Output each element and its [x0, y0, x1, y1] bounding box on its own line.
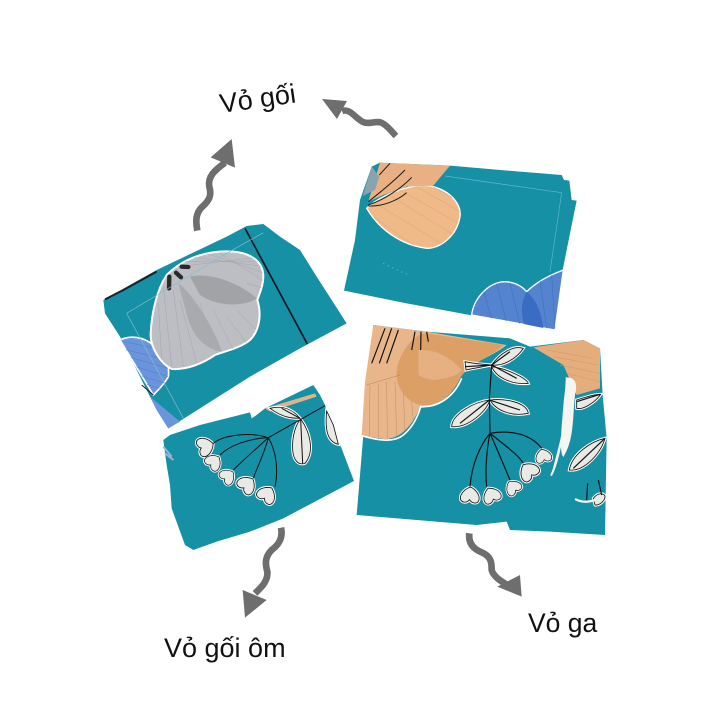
panel: bolster case [163, 385, 354, 550]
arrow: to Vỏ ga [469, 533, 522, 597]
leaves and heart flowers [452, 348, 605, 505]
panel: top-right pillowcase [344, 163, 577, 330]
panel: left pillowcase [103, 224, 347, 428]
stamen [169, 267, 188, 288]
label: Vỏ gối ôm: Vỏ gối ôm [164, 633, 286, 663]
orange petal [367, 186, 460, 248]
tie [551, 378, 575, 476]
blue petal [120, 337, 169, 395]
stems [372, 328, 605, 500]
label: Vỏ gối: Vỏ gối [218, 79, 298, 119]
label: Vỏ ga: Vỏ ga [528, 608, 598, 638]
arrow: to Vỏ gối left [196, 139, 235, 231]
blue petals [472, 270, 563, 330]
arrow: to Vỏ gối ôm [243, 528, 282, 618]
panel: fitted bed sheet [357, 325, 607, 535]
right orange petal [533, 340, 600, 395]
gray flower [151, 251, 263, 369]
orange petal [362, 325, 507, 439]
arrow: to Vỏ gối right [322, 99, 396, 136]
